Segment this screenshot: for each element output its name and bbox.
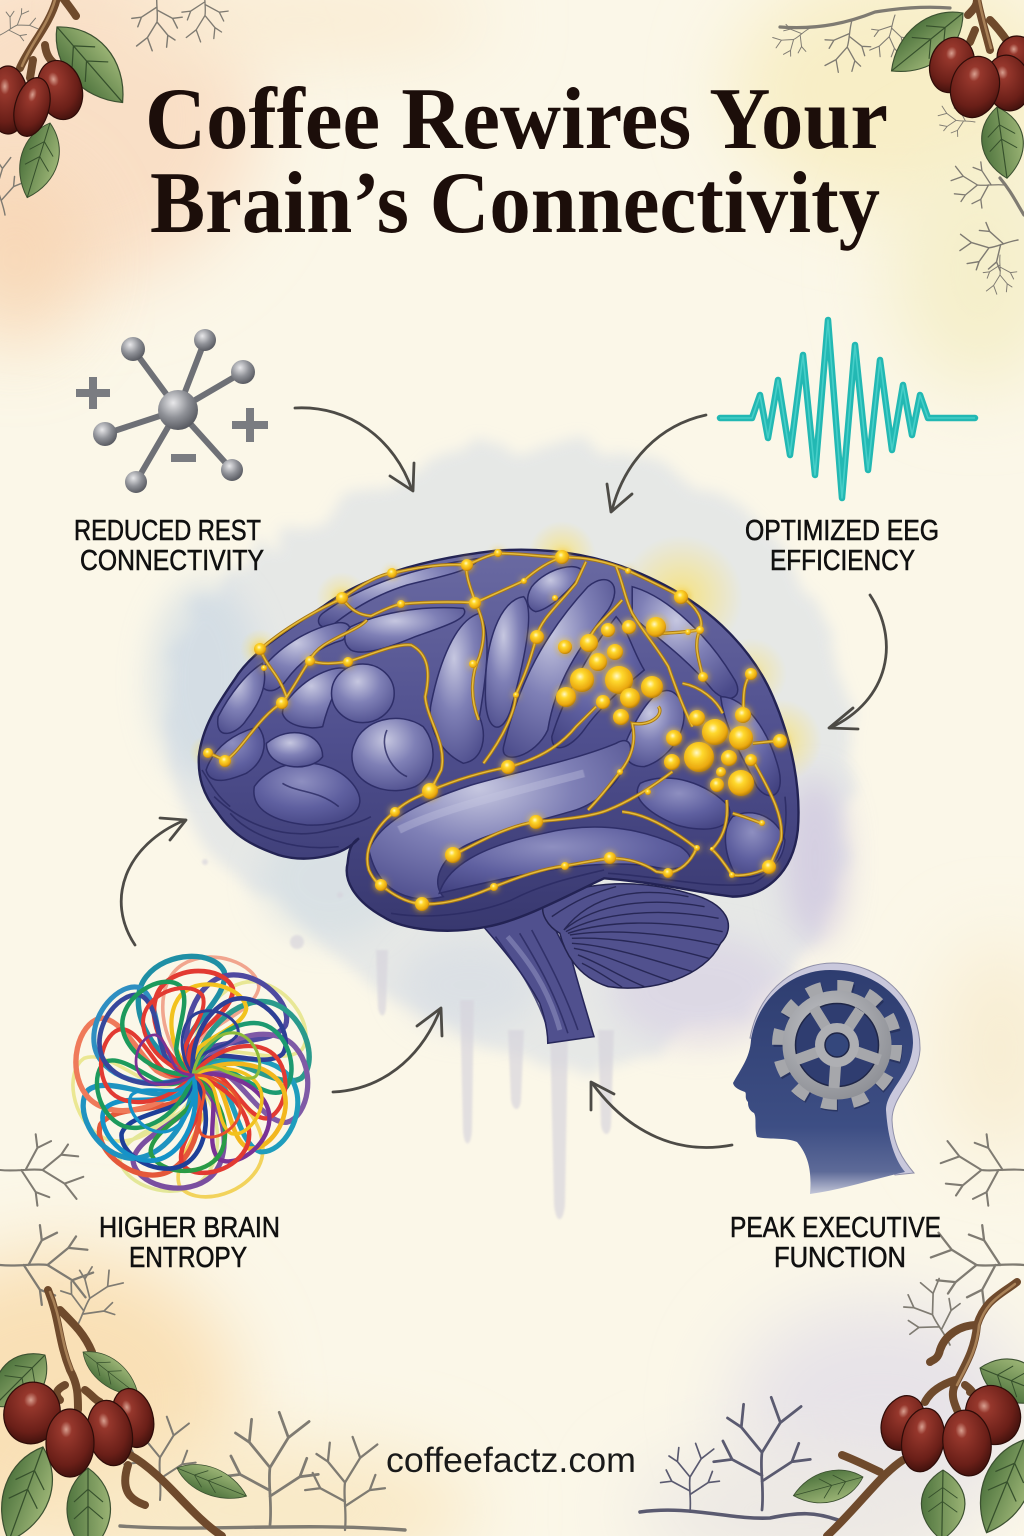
upper strip gyri — [318, 558, 479, 627]
arrow: entropy up to brain — [121, 818, 186, 945]
arrow: molecule to brain — [295, 408, 414, 491]
gear — [779, 987, 895, 1104]
brain stem — [483, 903, 594, 1043]
corner: bottom-right coffee berries — [790, 1282, 1024, 1536]
label: reduced rest connectivity: CONNECTIVITY — [80, 545, 264, 577]
drips — [202, 859, 614, 1219]
parietal/occipital gyri — [632, 587, 738, 698]
label: reduced rest connectivity: REDUCED REST — [74, 515, 261, 547]
central gyri — [332, 664, 394, 723]
corner: top-left coffee berries — [0, 0, 140, 203]
gold cluster: upper — [556, 617, 666, 725]
label: optimized EEG efficiency: EFFICIENCY — [770, 545, 915, 577]
title — [145, 71, 888, 252]
label: optimized EEG efficiency: OPTIMIZED EEG — [745, 515, 939, 547]
cortex — [199, 550, 799, 931]
label: higher brain entropy: HIGHER BRAIN — [99, 1212, 280, 1244]
label: reduced rest connectivity — [74, 515, 264, 577]
title: Coffee Rewires Your — [145, 71, 888, 168]
title: Brain’s Connectivity — [150, 155, 880, 252]
arrow: efficiency to brain — [829, 595, 886, 729]
icon: EEG wave — [720, 320, 975, 498]
label: peak executive function: FUNCTION — [774, 1242, 906, 1274]
golden nodes — [203, 549, 787, 911]
label: optimized EEG efficiency — [745, 515, 939, 577]
icon: rainbow swirl — [64, 942, 316, 1208]
golden network lines — [208, 553, 781, 904]
gold cluster: lower — [664, 707, 757, 796]
arrow: EEG to brain — [607, 415, 706, 512]
label: peak executive function — [730, 1212, 941, 1274]
label: higher brain entropy: ENTROPY — [129, 1242, 247, 1274]
arrow: executive function to brain stem — [591, 1082, 732, 1147]
gold halos — [189, 521, 822, 783]
icon: molecule network — [76, 329, 268, 493]
watercolor wash behind brain — [150, 442, 848, 1219]
cerebellum — [543, 884, 728, 988]
label: higher brain entropy — [99, 1212, 280, 1274]
label: peak executive function: PEAK EXECUTIVE — [730, 1212, 941, 1244]
icon: head with gear — [733, 963, 920, 1194]
footer website: coffeefactz.com — [386, 1441, 636, 1480]
corner: top-right coffee berries — [879, 0, 1024, 181]
temporal lobe — [369, 741, 631, 899]
arrow: entropy to brain stem — [333, 1008, 442, 1092]
corner: bottom-left coffee berries — [0, 1290, 252, 1536]
brain illustration — [189, 521, 822, 1043]
